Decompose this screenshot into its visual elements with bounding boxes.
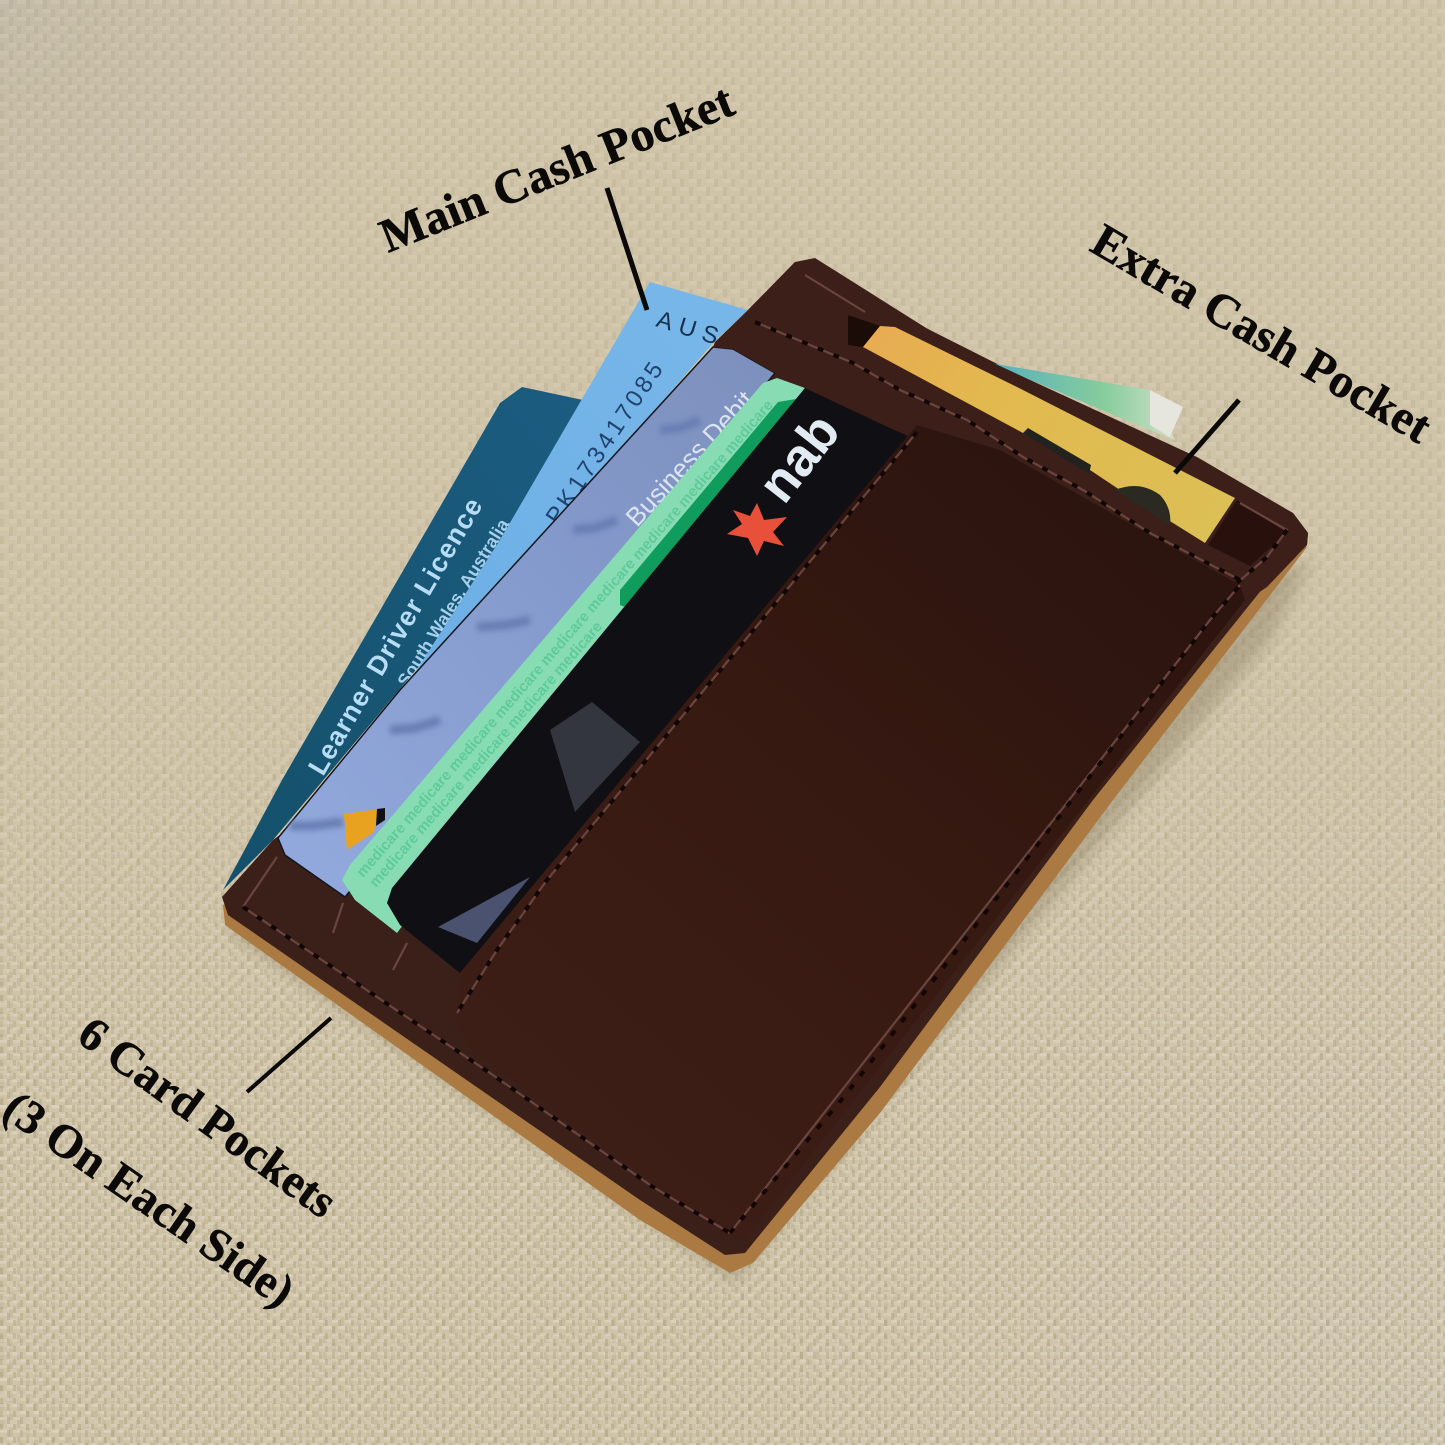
dark wallet base	[222, 262, 1308, 1255]
card: blue id card: AUS	[653, 306, 728, 352]
card: business debit	[278, 347, 775, 897]
card: blue id card: PK173417085	[541, 354, 671, 529]
nab logo	[727, 403, 851, 556]
label: main cash pocket: Main Cash Pocket	[372, 74, 741, 263]
card: learner driver licence: South Wales, Australia	[393, 514, 514, 690]
card: learner driver licence	[223, 387, 583, 890]
wallet	[222, 258, 1308, 1273]
wallet shadow	[225, 560, 1312, 1282]
stitching	[243, 275, 1287, 1233]
card: business debit: Business Debit	[619, 384, 760, 532]
back panel	[713, 258, 1308, 605]
card: nab black	[387, 388, 917, 973]
nab logo: nab	[747, 403, 851, 513]
card: yellow in extra cash pocket	[863, 326, 1235, 543]
banknote	[990, 363, 1183, 440]
label: 6 card pockets: 6 Card Pockets	[69, 1007, 346, 1228]
card: medicare green: medicare medicare medicare medicare medicare	[366, 618, 606, 891]
bank logo	[344, 808, 385, 850]
main front pocket	[455, 425, 1245, 1240]
card: medicare green: medicare medicare medicare medicare medicare medicare medicare medicare medicare	[353, 397, 777, 881]
extra cash pocket opening	[848, 315, 880, 347]
tan leather edge	[223, 540, 1307, 1273]
card: learner driver licence: Learner Driver Licence	[302, 492, 489, 780]
card: blue id card	[400, 282, 748, 700]
label: 6 card pockets	[0, 1007, 346, 1318]
label: 6 card pockets: (3 On Each Side)	[0, 1081, 304, 1318]
label: extra cash pocket: Extra Cash Pocket	[1082, 214, 1440, 454]
